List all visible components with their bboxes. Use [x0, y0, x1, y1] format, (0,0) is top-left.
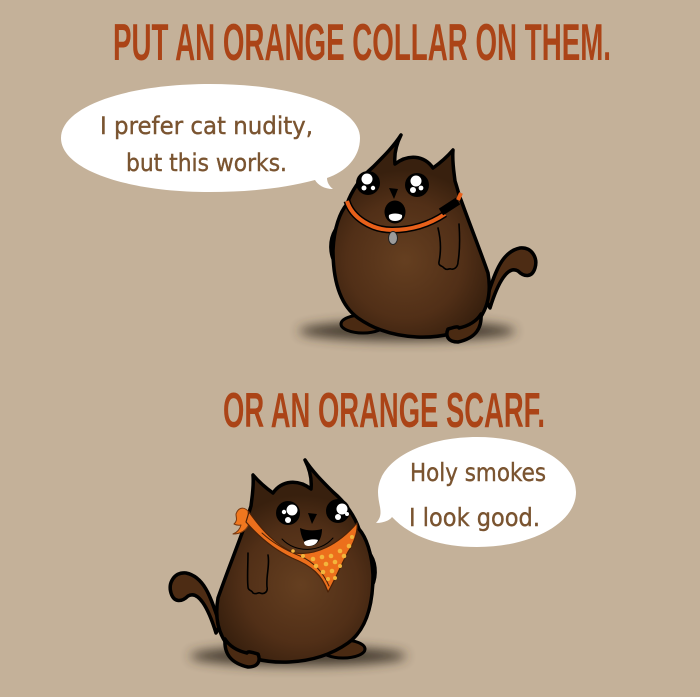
- collar tag: [388, 232, 398, 244]
- shadow: scarf cat: [190, 646, 406, 666]
- back arm: [331, 230, 336, 265]
- speech bubble: scarf cat: Holy smokes: [410, 458, 546, 487]
- right eye: [405, 173, 429, 197]
- shadow: collar cat: [299, 321, 515, 341]
- right foot: [447, 314, 481, 342]
- speech bubble: scarf cat: I look good.: [409, 503, 540, 532]
- speech bubble: scarf cat: [376, 437, 576, 547]
- speech bubble: collar cat: I prefer cat nudity,: [100, 112, 313, 140]
- speech bubble: collar cat: [61, 84, 360, 192]
- right foot: [321, 640, 365, 658]
- tail: [170, 573, 220, 633]
- scarf hem: [262, 533, 329, 586]
- nose: [308, 513, 317, 524]
- cat with orange collar: [331, 135, 536, 342]
- scarf dots: [291, 535, 354, 581]
- right arm: [438, 224, 460, 269]
- left foot: [341, 315, 385, 333]
- speech bubble: collar cat: but this works.: [126, 149, 287, 177]
- scarf knot: [233, 508, 249, 534]
- mouth: [300, 528, 322, 546]
- smile: [282, 538, 333, 549]
- right eye: [326, 499, 350, 523]
- left foot: [225, 639, 259, 667]
- left eye: [356, 171, 380, 195]
- body: [333, 135, 489, 337]
- nose: [389, 188, 398, 199]
- mouth: [384, 200, 406, 224]
- back arm: [370, 555, 375, 590]
- collar: [347, 201, 445, 230]
- cat with orange scarf: [170, 460, 375, 667]
- left arm: [248, 553, 269, 594]
- scarf: [246, 512, 357, 592]
- body: [217, 460, 373, 662]
- tail: [486, 248, 536, 308]
- left eye: [276, 501, 300, 525]
